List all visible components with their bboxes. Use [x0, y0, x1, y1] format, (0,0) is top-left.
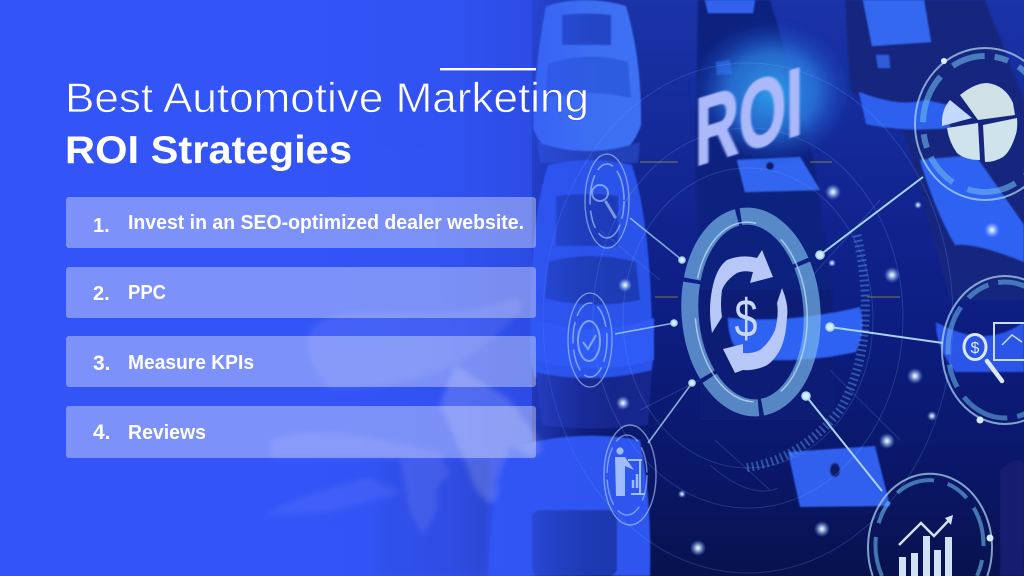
- item 2: 2.: [93, 283, 110, 305]
- item 1: Invest in an SEO-optimized dealer website.: [128, 212, 524, 234]
- icon: magnifier ring: [585, 154, 629, 248]
- item 1: [66, 197, 536, 248]
- item 4: Reviews: [128, 422, 206, 444]
- strategy list: [66, 197, 536, 458]
- item 4: 4.: [93, 421, 111, 444]
- car: top left column: [533, 0, 641, 165]
- icon: badge ring: [568, 293, 612, 387]
- icon: central dollar cycle: $: [734, 289, 758, 349]
- icon: growth chart ring: [868, 474, 994, 576]
- icon: screen and coin ring: [942, 276, 1024, 424]
- car: right column: [845, 0, 1024, 576]
- connector lines: [615, 177, 943, 491]
- item 3: Measure KPIs: [128, 352, 254, 374]
- car: centre column: [695, 0, 890, 507]
- icon: presenter ring: [604, 425, 656, 525]
- car: middle left column: [530, 160, 654, 428]
- item 3: 3.: [93, 352, 111, 375]
- title: Best Automotive Marketing: [65, 74, 589, 121]
- hand (faint overlay): [262, 300, 541, 535]
- icon: pie chart ring: [915, 48, 1024, 200]
- item 2: PPC: [128, 282, 166, 304]
- title: ROI Strategies: [65, 129, 352, 172]
- item 1: 1.: [93, 215, 110, 237]
- faint HUD radial lines: [543, 63, 953, 573]
- icon: screen and coin ring: $: [971, 340, 980, 357]
- item 4: [66, 406, 536, 458]
- icon: central dollar cycle: [683, 212, 819, 412]
- ROI glow: [690, 20, 854, 164]
- accent line: [440, 68, 536, 70]
- far-left faint cars: [290, 150, 490, 576]
- tick scale arc: [745, 235, 865, 468]
- ROI label: ROI: [695, 46, 803, 187]
- car: bottom left column: [488, 436, 650, 576]
- glowing sparks: [616, 184, 1000, 556]
- item 2: [66, 267, 536, 318]
- item 3: [66, 336, 536, 387]
- title: [65, 74, 589, 172]
